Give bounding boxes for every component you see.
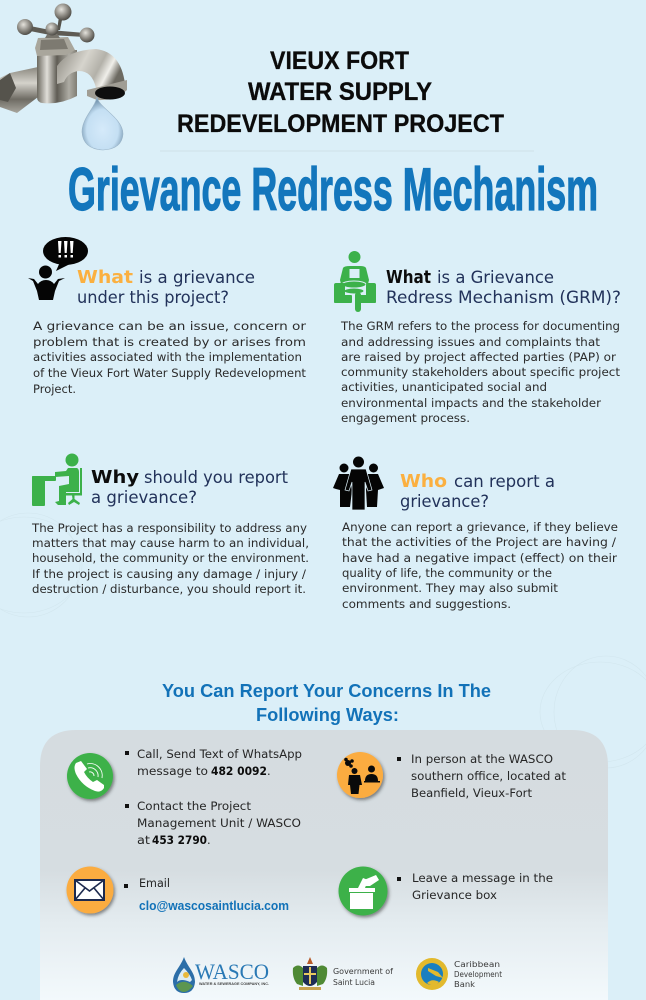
text block: engagement process. <box>341 411 470 425</box>
text: contact: 453 2790 <box>152 833 207 847</box>
heading <box>386 267 621 307</box>
text: email: Email <box>139 876 170 890</box>
logo: Caribbean Development Bank: Development <box>454 969 503 979</box>
text: contact: Contact the Project <box>137 799 252 813</box>
text: contact: Management Unit / WASCO <box>137 816 301 830</box>
text block: community stakeholders about specific project <box>341 365 621 379</box>
text block <box>342 520 618 611</box>
text block: Anyone can report a grievance, if they believe <box>342 520 618 534</box>
icon: phone <box>67 753 113 799</box>
icon: seated person in green <box>334 251 376 312</box>
logo: WASCO: WATER & SEWERAGE COMPANY, INC. <box>199 981 269 986</box>
text: contact: . <box>207 833 211 847</box>
heading <box>91 467 289 507</box>
text: contact <box>125 799 301 847</box>
heading: can report a <box>454 472 555 491</box>
logo: Caribbean Development Bank: Bank <box>454 979 475 989</box>
panel: reporting channels <box>40 730 608 1000</box>
text block: Project. <box>33 382 76 396</box>
panel: what is a grievance <box>28 237 307 396</box>
text block: environment. They may also submit <box>342 581 559 595</box>
text block: problem that is created by or arises from <box>33 335 306 349</box>
text: grievance box <box>397 871 553 902</box>
text block: A grievance can be an issue, concern or <box>33 319 306 333</box>
text block: matters that may cause harm to an individual, <box>32 536 309 550</box>
logo: WASCO: WASCO <box>195 959 269 984</box>
text block: are raised by project affected parties (PAP) or <box>341 350 616 364</box>
text block: that the activities of the Project are having / <box>342 535 616 549</box>
panel: why report <box>31 454 309 596</box>
text: in person <box>397 752 567 800</box>
panel: what is a GRM <box>334 251 621 425</box>
heading <box>77 267 255 307</box>
logo: WASCO <box>173 957 269 993</box>
section heading: Following Ways: <box>256 704 399 725</box>
text block: activities, unanticipated social and <box>341 380 547 394</box>
text: grievance box: Grievance box <box>412 888 497 902</box>
heading: is a Grievance <box>437 268 554 287</box>
text block: of the Vieux Fort Water Supply Redevelopment <box>33 366 307 380</box>
text: contact: at <box>137 833 151 847</box>
text: call: message to <box>137 764 208 778</box>
heading: Redress Mechanism (GRM)? <box>386 288 621 307</box>
text: in person: Beanfield, Vieux-Fort <box>411 786 533 800</box>
section heading <box>162 680 491 725</box>
icon: person at desk in green <box>32 454 82 506</box>
logo: Caribbean Development Bank: Caribbean <box>454 959 500 969</box>
icon: group of three people <box>333 456 384 510</box>
heading <box>400 471 555 511</box>
panel: who can report <box>333 456 618 611</box>
text block: and addressing issues and complaints that <box>341 335 601 349</box>
icon: in person office <box>337 752 383 798</box>
heading: is a grievance <box>139 268 255 287</box>
logo: Government of Saint Lucia: Government of <box>333 966 394 976</box>
heading: a grievance? <box>91 488 197 507</box>
title: VIEUX FORT <box>270 47 409 75</box>
text block <box>340 319 621 425</box>
title <box>177 47 504 138</box>
text block: The Project has a responsibility to address any <box>31 521 307 535</box>
text: call: . <box>267 764 271 778</box>
text: grievance box: Leave a message in the <box>412 871 553 885</box>
text block <box>31 521 309 596</box>
text block: The GRM refers to the process for documenting <box>340 319 620 333</box>
text block: destruction / disturbance, you should report it. <box>32 582 306 596</box>
text: email <box>124 876 289 913</box>
text: in person: southern office, located at <box>411 769 567 783</box>
logo: Government of Saint Lucia: Saint Lucia <box>333 977 375 987</box>
text: call: Call, Send Text of WhatsApp <box>137 747 302 761</box>
title: REDEVELOPMENT PROJECT <box>177 110 504 138</box>
text block: activities associated with the implementation <box>33 350 302 364</box>
text block: comments and suggestions. <box>342 597 511 611</box>
icon: water tap with drop <box>0 4 127 150</box>
heading: should you report <box>144 468 289 487</box>
text: in person: In person at the WASCO <box>411 752 553 766</box>
heading: What <box>77 267 133 288</box>
icon: person with speech bubble <box>28 237 88 300</box>
logo: Government of Saint Lucia <box>293 957 394 990</box>
heading: grievance? <box>400 492 489 511</box>
heading: Why <box>91 467 139 488</box>
text block: household, the community or the environment. <box>32 551 309 565</box>
heading: What <box>386 267 431 288</box>
decorative rings <box>0 513 646 768</box>
heading: under this project? <box>77 288 229 307</box>
icon: grievance box <box>338 866 388 916</box>
logo: Caribbean Development Bank <box>416 958 503 990</box>
section heading: You Can Report Your Concerns In The <box>162 680 491 701</box>
text: call: 482 0092 <box>211 764 267 778</box>
heading: Who <box>400 471 447 492</box>
text: email: clo@wascosaintlucia.com <box>139 898 289 913</box>
text block: If the project is causing any damage / injury / <box>32 567 306 581</box>
text: call <box>125 747 302 778</box>
text block <box>33 319 307 396</box>
title: WATER SUPPLY <box>248 78 432 106</box>
text block: have had a negative impact (effect) on their <box>342 551 617 565</box>
text block: quality of life, the community or the <box>342 566 552 580</box>
text block: environmental impacts and the stakeholder <box>341 396 601 410</box>
icon: envelope <box>66 866 114 914</box>
